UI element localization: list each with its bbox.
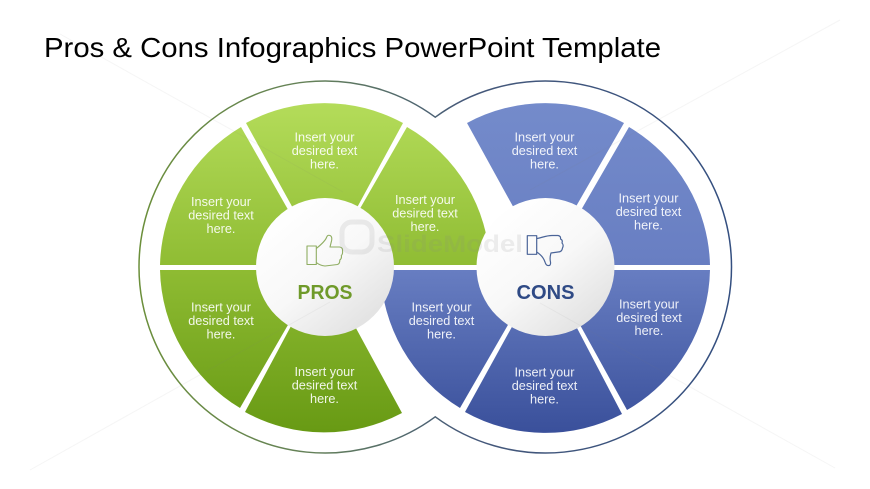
panel: pros segment top right (335, 127, 490, 265)
panel: cons segment top right: desired text (616, 205, 682, 219)
panel: pros segment top left: Insert your (191, 195, 252, 209)
panel: pros hub (256, 198, 394, 336)
panel: pros segment bottom: desired text (292, 378, 358, 392)
panel: cons segment bottom left: Insert your (412, 300, 472, 314)
panel: cons segment bottom left: desired text (409, 314, 475, 328)
panel: cons hub (476, 198, 614, 336)
panel: pros segment top right: desired text (392, 206, 458, 220)
panel: cons segment top (467, 103, 624, 250)
label: CONS: CONS (516, 282, 574, 304)
panel: pros segment top left: here. (207, 222, 235, 236)
panel: pros segment top (246, 103, 403, 250)
panel: pros segment bottom (245, 285, 402, 432)
panel: pros segment top: Insert your (295, 130, 355, 144)
outer outline: joined circles (139, 81, 732, 453)
panel: pros segment bottom left: desired text (188, 314, 254, 328)
label: PROS: PROS (298, 282, 352, 304)
panel: cons segment bottom: here. (530, 392, 559, 406)
panel: pros segment top: here. (310, 158, 339, 172)
panel: pros segment bottom left: Insert your (191, 300, 252, 314)
panel: cons segment bottom left: here. (427, 328, 456, 342)
panel: cons segment bottom right: desired text (616, 311, 682, 325)
panel: cons segment top: here. (530, 158, 559, 172)
panel: pros segment top left: desired text (188, 208, 254, 222)
panel: pros segment top: desired text (292, 144, 358, 158)
panel: cons segment bottom left (381, 270, 531, 408)
panel: cons segment top: desired text (512, 144, 578, 158)
panel: cons segment top right: here. (634, 218, 663, 232)
title: Pros & Cons Infographics PowerPoint Template (44, 32, 661, 63)
panel: pros segment bottom left: here. (207, 328, 235, 342)
panel: cons segment bottom right (558, 270, 710, 410)
panel: cons segment bottom right: here. (635, 324, 663, 338)
panel: cons segment bottom: desired text (512, 379, 578, 393)
panel: cons segment bottom: Insert your (515, 366, 575, 380)
panel: pros segment top right: here. (411, 220, 439, 234)
watermark: SlideModel (377, 231, 523, 258)
icon: thumbs up (307, 235, 343, 266)
panel: cons segment bottom (465, 285, 622, 433)
panel: cons segment top: Insert your (515, 130, 575, 144)
panel: cons segment top right: Insert your (619, 192, 679, 206)
panel: pros segment top left (160, 127, 311, 265)
panel: pros segment bottom: Insert your (295, 365, 355, 379)
panel: cons segment bottom right: Insert your (619, 298, 680, 312)
icon: thumbs down (527, 236, 563, 266)
panel: cons segment top right (558, 127, 710, 265)
panel: pros segment bottom: here. (310, 392, 339, 406)
panel: pros segment top right: Insert your (395, 193, 456, 207)
panel: pros segment bottom left (160, 270, 311, 408)
